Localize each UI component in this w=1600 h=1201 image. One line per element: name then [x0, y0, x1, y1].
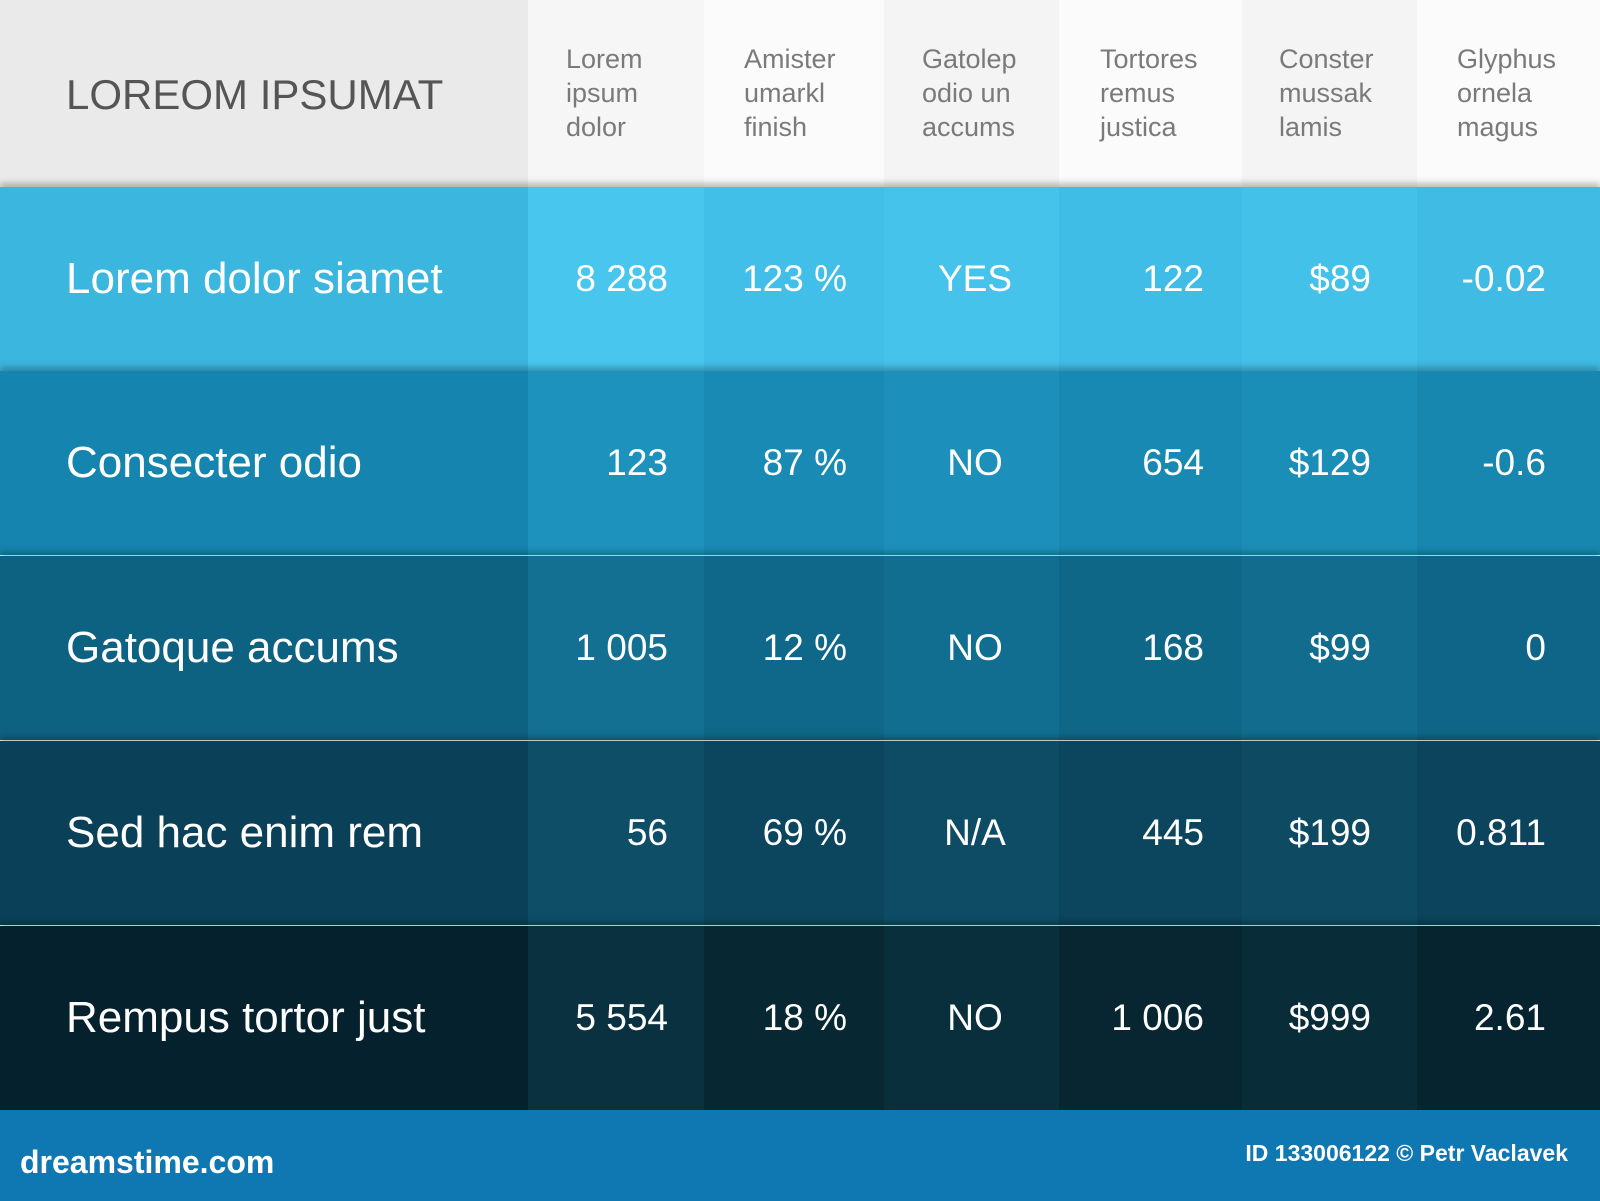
column headers: ipsum — [566, 78, 638, 108]
row 4: $199 — [1289, 812, 1371, 853]
column headers: Amister — [744, 44, 836, 74]
column headers: ornela — [1457, 78, 1532, 108]
column headers: lamis — [1279, 112, 1342, 142]
column headers: umarkl — [744, 78, 825, 108]
row 4: Sed hac enim rem — [66, 808, 423, 857]
row 4: 56 — [627, 812, 668, 853]
row 2: 654 — [1142, 442, 1204, 483]
row 5: 2.61 — [1474, 997, 1546, 1038]
column headers: Glyphus — [1457, 44, 1556, 74]
footer — [0, 1110, 1600, 1201]
footer credit: ID 133006122 © Petr Vaclavek — [1245, 1140, 1568, 1166]
column headers: Lorem — [566, 44, 643, 74]
row 1: $89 — [1309, 258, 1371, 299]
row 3 — [0, 556, 1600, 740]
column headers: magus — [1457, 112, 1538, 142]
row 3: Gatoque accums — [66, 623, 399, 672]
row 2 — [0, 371, 1600, 555]
row 5: 18 % — [763, 997, 847, 1038]
row 4: N/A — [944, 812, 1006, 853]
row 1: 8 288 — [575, 258, 668, 299]
column headers: Tortores — [1100, 44, 1198, 74]
row 3: 168 — [1142, 627, 1204, 668]
column headers — [566, 44, 1556, 142]
row 1: -0.02 — [1462, 258, 1546, 299]
row 3: 0 — [1525, 627, 1546, 668]
row 1 — [0, 187, 1600, 371]
column headers: Conster — [1279, 44, 1374, 74]
row 2: -0.6 — [1482, 442, 1546, 483]
row 4 — [0, 741, 1600, 925]
title: LOREOM IPSUMAT — [66, 71, 443, 118]
row 4: 445 — [1142, 812, 1204, 853]
column headers: odio un — [922, 78, 1011, 108]
row 1: Lorem dolor siamet — [66, 254, 443, 303]
column headers: justica — [1100, 112, 1177, 142]
row 1: 122 — [1142, 258, 1204, 299]
row 3: 1 005 — [575, 627, 668, 668]
column headers: Gatolep — [922, 44, 1017, 74]
row 2: $129 — [1289, 442, 1371, 483]
row 3: $99 — [1309, 627, 1371, 668]
column headers: finish — [744, 112, 807, 142]
row 5: 5 554 — [575, 997, 668, 1038]
footer logo: dreamstime.com — [20, 1144, 274, 1180]
row 2: NO — [947, 442, 1003, 483]
row 1: YES — [938, 258, 1012, 299]
row 2: Consecter odio — [66, 438, 362, 487]
column headers: accums — [922, 112, 1015, 142]
row 5: $999 — [1289, 997, 1371, 1038]
header band — [0, 0, 1600, 187]
row 4: 69 % — [763, 812, 847, 853]
row 1: 123 % — [742, 258, 847, 299]
row 5: NO — [947, 997, 1003, 1038]
column headers: remus — [1100, 78, 1175, 108]
row 5: 1 006 — [1111, 997, 1204, 1038]
row 4: 0.811 — [1456, 812, 1546, 853]
row 5: Rempus tortor just — [66, 993, 425, 1042]
row 3: 12 % — [763, 627, 847, 668]
row 2: 87 % — [763, 442, 847, 483]
row 2: 123 — [606, 442, 668, 483]
column headers: mussak — [1279, 78, 1372, 108]
row 3: NO — [947, 627, 1003, 668]
row 5 — [0, 926, 1600, 1110]
column headers: dolor — [566, 112, 626, 142]
